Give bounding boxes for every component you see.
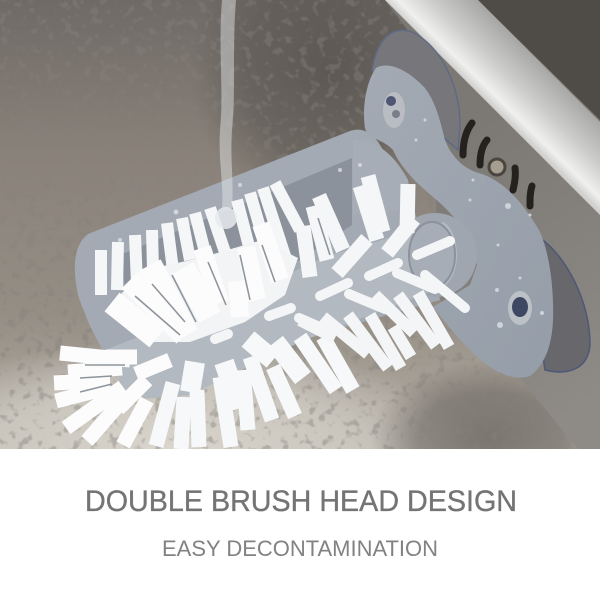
brush core [105,222,457,400]
subtitle: EASY DECONTAMINATION [162,536,438,561]
bristles: right row [215,241,465,368]
bristles: upper dense mass [110,240,298,342]
wall slots and screw [463,123,532,206]
bristles: left cluster [54,224,280,445]
brush hub ring [409,222,455,288]
white caption panel [0,449,600,600]
water droplets on plate [118,118,544,328]
hub collar [393,213,477,297]
tray side wall [353,140,412,215]
bristles: lower row [156,337,353,449]
bristles: back row [101,176,414,295]
suction cup: bottom [535,238,590,372]
plate screw: bottom [508,291,532,325]
water stream [215,0,237,229]
title: DOUBLE BRUSH HEAD DESIGN [85,485,517,518]
plate screw: top [383,92,405,128]
brush tray backing [75,130,440,375]
bristle gaps: shadow lines [80,218,330,440]
mounting plate [364,65,553,378]
tray inner recess [120,158,352,320]
suction cup: top [372,30,460,150]
